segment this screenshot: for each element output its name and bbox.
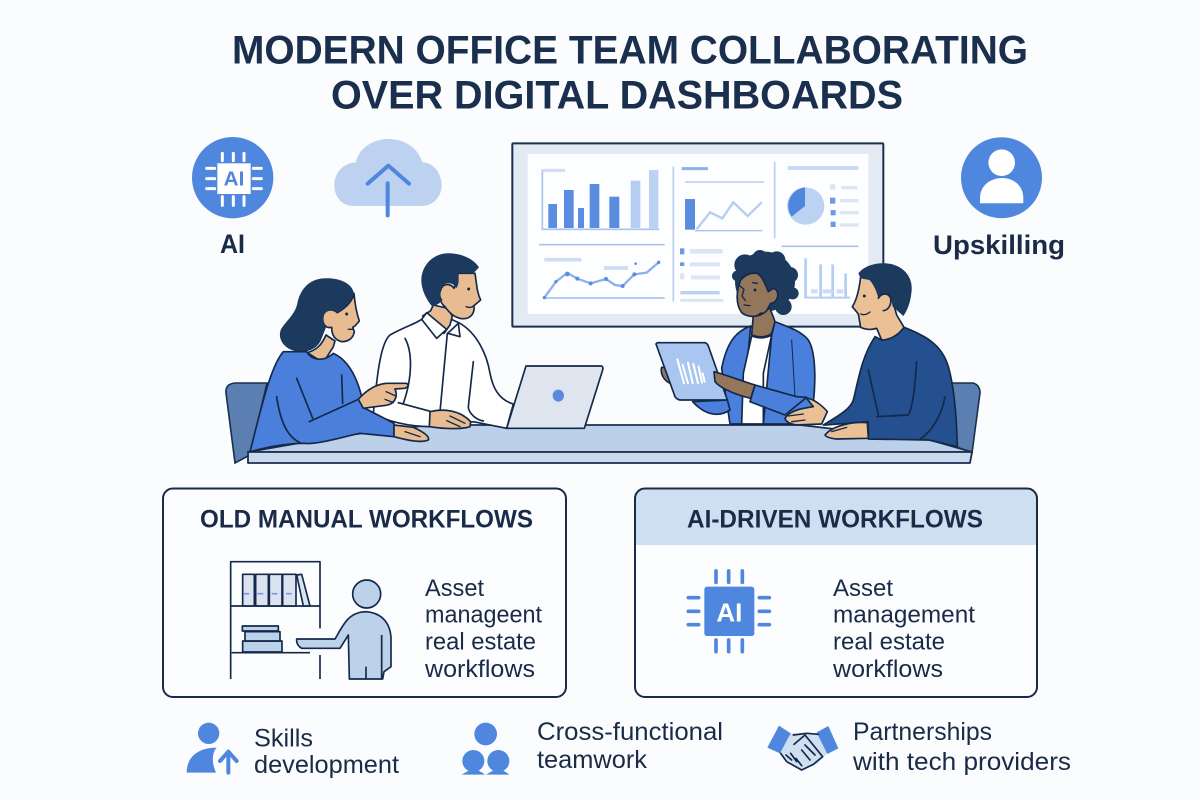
- person: man in white shirt with laptop: [373, 253, 603, 429]
- text: cross-functional teamwork: [537, 718, 723, 774]
- text: old workflows list: manageent: [425, 602, 542, 628]
- text: partnerships with tech providers: Partnerships: [853, 718, 992, 746]
- title: MODERN OFFICE TEAM COLLABORATING: [232, 28, 1028, 72]
- text: cross-functional teamwork: teamwork: [537, 746, 647, 774]
- person: woman with tablet: [656, 250, 815, 424]
- chair: left: [226, 383, 267, 463]
- chart: list bottom middle: [680, 248, 723, 300]
- icon: person at bookshelf: [231, 562, 391, 679]
- chart: bar and line top middle: [673, 162, 775, 302]
- text: old workflows list: workflows: [424, 656, 535, 683]
- icon: upskilling person badge: [961, 137, 1042, 218]
- panel: AI-driven workflows: [635, 488, 1037, 697]
- heading: AI-driven workflows: AI-DRIVEN WORKFLOWS: [687, 506, 983, 534]
- title: [232, 28, 1028, 118]
- text: cross-functional teamwork: Cross-functional: [537, 718, 723, 746]
- person: man in navy sweater: [785, 263, 957, 447]
- label: AI: AI: [220, 229, 245, 259]
- icon: skills development: [187, 723, 237, 773]
- text: old workflows list: [424, 575, 542, 683]
- chart: pie with legend: [787, 168, 859, 227]
- chair: right: [951, 383, 980, 453]
- person: woman in blue pointing: [250, 278, 429, 452]
- title: OVER DIGITAL DASHBOARDS: [331, 74, 903, 118]
- text: old workflows list: Asset: [425, 575, 484, 602]
- chart: line chart bottom left: [539, 245, 665, 299]
- icon: cloud upload: [334, 139, 442, 215]
- icon: AI chip: AI: [716, 598, 742, 628]
- text: skills development: development: [254, 751, 399, 779]
- icon: cross-functional teamwork: [462, 723, 509, 775]
- laptop: [507, 366, 603, 428]
- text: skills development: [254, 724, 399, 779]
- dashboard screen: [512, 143, 883, 327]
- label: Upskilling: Upskilling: [933, 230, 1065, 260]
- text: AI workflows list: workflows: [832, 656, 943, 683]
- text: AI workflows list: [832, 575, 975, 683]
- icon: handshake: [767, 726, 838, 770]
- panel: old manual workflows: [163, 488, 566, 697]
- chart: bar chart top left: [542, 169, 659, 229]
- text: AI workflows list: Asset: [833, 575, 893, 602]
- icon: AI chip badge: [192, 137, 273, 218]
- text: old workflows list: real estate: [425, 628, 536, 656]
- text: skills development: Skills: [254, 724, 313, 752]
- chart: bars bottom right: [782, 246, 858, 298]
- icon: AI chip badge: AI: [224, 168, 244, 191]
- text: AI workflows list: real estate: [833, 628, 945, 656]
- tablet: [656, 343, 727, 400]
- table: [248, 425, 972, 463]
- heading: old manual workflows: OLD MANUAL WORKFLOWS: [200, 506, 533, 534]
- text: partnerships with tech providers: [852, 718, 1071, 776]
- icon: AI chip: [688, 571, 769, 652]
- text: AI workflows list: management: [833, 602, 975, 628]
- text: partnerships with tech providers: with tech providers: [852, 748, 1071, 776]
